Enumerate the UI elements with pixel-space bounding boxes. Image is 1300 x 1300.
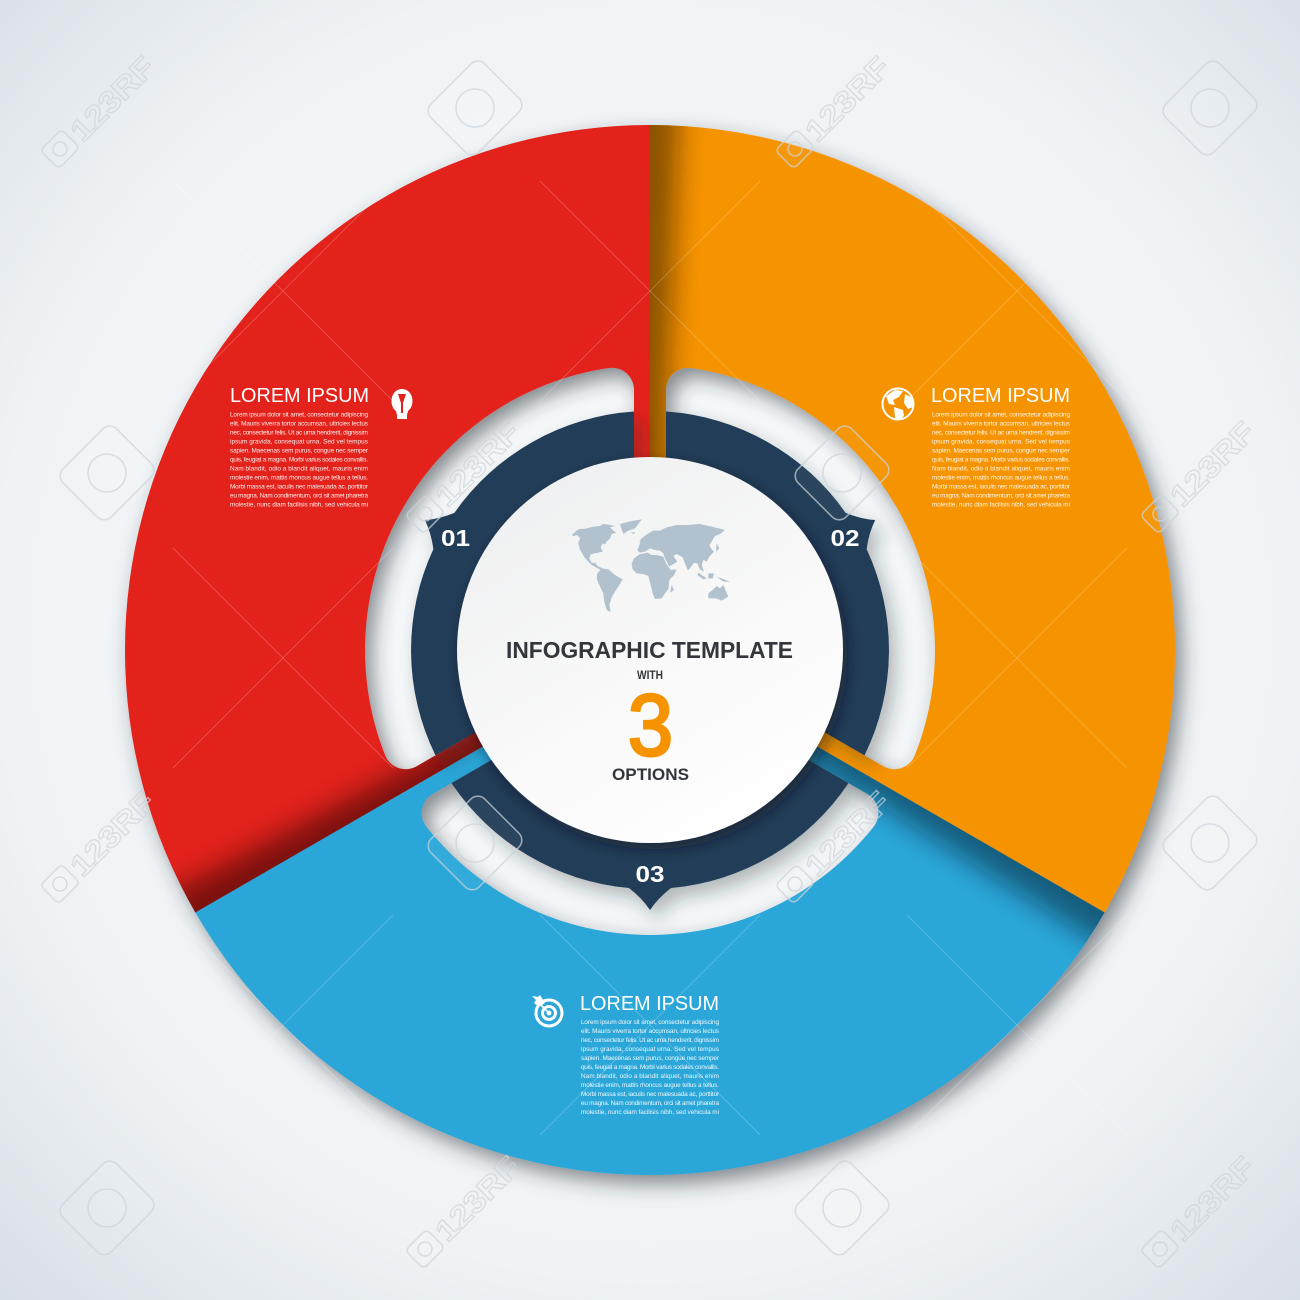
text block: blue: quis, feugiat a magna. Morbi varius sodales convallis. — [581, 1064, 719, 1071]
text block: orange: sapien. Maecenas sem purus, congue nec semper — [932, 448, 1071, 454]
number 01: 01 — [441, 525, 470, 551]
watermarks: 123RF — [64, 786, 162, 883]
watermarks: 123RF — [429, 1151, 527, 1248]
text block: orange: Morbi massa est, iaculis nec malesuada ac, porttitor — [932, 484, 1071, 490]
text block: red: LOREM IPSUM — [230, 385, 369, 407]
text block: orange: eu magna. Nam condimentum, orci sit amet pharetra — [932, 492, 1070, 500]
watermarks: 123RF — [1164, 1151, 1262, 1248]
text block: orange: nec, consectetur felis. Ut ac urna hendrerit, dignissim — [932, 430, 1070, 436]
dark ring with number tabs — [326, 348, 974, 910]
text block: blue: elit. Mauris viverra tortor accumsan, ultricies lectus — [581, 1028, 719, 1035]
text block: blue: sapien. Maecenas sem purus, congue nec semper — [581, 1055, 720, 1062]
text block: blue: nec, consectetur felis. Ut ac urna hendrerit, dignissim — [581, 1037, 719, 1044]
thin diagonal watermark lines — [173, 181, 1127, 1135]
watermarks: 123RF — [799, 786, 897, 883]
text block: red: Lorem ipsum dolor sit amet, consectetur adipiscing — [230, 412, 368, 418]
sector edge shadows — [174, 125, 1104, 1024]
sector: red option 01 — [0, 0, 877, 1044]
text block: blue: Morbi massa est, iaculis nec malesuada ac, porttitor — [581, 1091, 720, 1098]
text block: red: elit. Mauris viverra tortor accumsan, ultricies lectus — [230, 420, 368, 428]
icon: world map — [572, 519, 730, 612]
text block: red — [230, 385, 369, 508]
watermarks: 123RF — [799, 51, 897, 148]
text block: red: nec, consectetur felis. Ut ac urna hendrerit, dignissim — [230, 430, 368, 436]
ring segment 03 — [452, 758, 848, 910]
center label: with: WITH — [637, 670, 663, 682]
text block: orange — [931, 385, 1071, 508]
icon: target with arrow — [532, 995, 562, 1026]
center number 3: 3 — [628, 677, 673, 774]
text block: orange: LOREM IPSUM — [931, 385, 1070, 407]
text block: orange: ipsum gravida, consequat urna. Sed vel tempus — [932, 438, 1070, 446]
text block: red: sapien. Maecenas sem purus, congue nec semper — [230, 448, 369, 454]
text block: orange: Nam blandit, odio a blandit aliquet, mauris enim — [932, 466, 1070, 472]
text block: blue: molestie enim, mattis rhoncus augue tellus a tellus. — [581, 1082, 719, 1089]
watermarks: 123RF — [1164, 416, 1262, 513]
text block: orange: quis, feugiat a magna. Morbi varius sodales convallis. — [932, 456, 1070, 464]
watermarks: 123RF — [64, 51, 162, 148]
text block: blue: ipsum gravida, consequat urna. Sed vel tempus — [581, 1046, 719, 1053]
text block: blue: Nam blandit, odio a blandit aliquet, mauris enim — [581, 1073, 719, 1080]
icon: globe — [882, 388, 914, 420]
text block: red: molestie enim, mattis rhoncus augue tellus a tellus. — [230, 474, 368, 482]
text block: orange: molestie, nunc diam facilisis nibh, sed vehicula mi — [932, 502, 1070, 508]
text block: red: ipsum gravida, consequat urna. Sed vel tempus — [230, 438, 368, 446]
text block: orange: Lorem ipsum dolor sit amet, consectetur adipiscing — [932, 412, 1070, 418]
watermarks: 123RF — [429, 416, 527, 513]
text block: orange: elit. Mauris viverra tortor accumsan, ultricies lectus — [932, 420, 1070, 428]
text block: red: Morbi massa est, iaculis nec malesuada ac, porttitor — [230, 484, 369, 490]
icon: light bulb — [391, 389, 413, 419]
sector: blue option 03 — [195, 650, 1105, 1175]
number 03: 03 — [636, 861, 664, 887]
number 02: 02 — [830, 525, 860, 551]
text block: blue: molestie, nunc diam facilisis nibh, sed vehicula mi — [581, 1109, 719, 1116]
ring segment 01 — [326, 348, 655, 768]
text block: red: quis, feugiat a magna. Morbi varius sodales convallis. — [230, 456, 368, 464]
text block: blue — [580, 993, 720, 1116]
center label: options: OPTIONS — [612, 766, 689, 784]
center disc — [457, 457, 843, 843]
text block: red: eu magna. Nam condimentum, orci sit amet pharetra — [230, 492, 368, 500]
text block: orange: molestie enim, mattis rhoncus augue tellus a tellus. — [932, 474, 1070, 482]
ring segment 02 — [645, 348, 974, 768]
text block: blue: eu magna. Nam condimentum, orci sit amet pharetra — [581, 1100, 719, 1107]
text block: red: Nam blandit, odio a blandit aliquet, mauris enim — [230, 466, 368, 472]
sector: orange option 02 — [423, 0, 1300, 1044]
center title: INFOGRAPHIC TEMPLATE — [506, 637, 793, 663]
text block: red: molestie, nunc diam facilisis nibh, sed vehicula mi — [230, 502, 368, 508]
text block: blue: Lorem ipsum dolor sit amet, consectetur adipiscing — [581, 1019, 719, 1026]
text block: blue: LOREM IPSUM — [580, 993, 719, 1015]
